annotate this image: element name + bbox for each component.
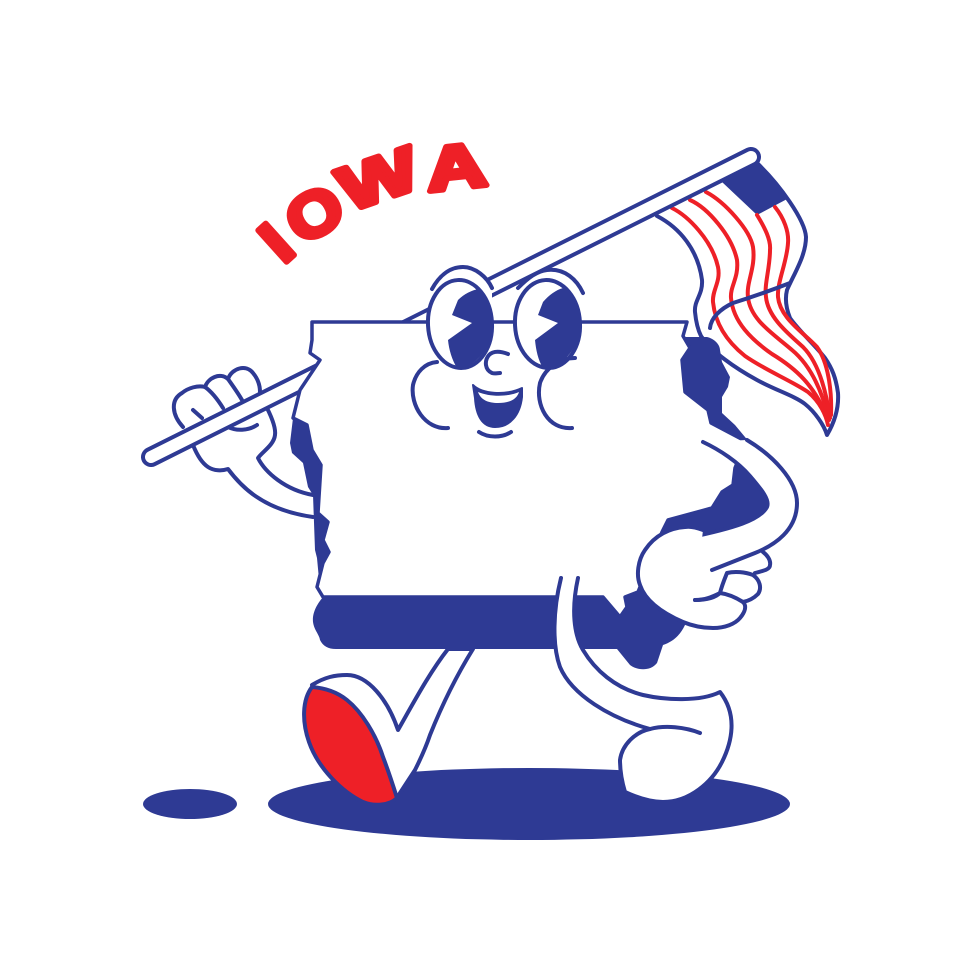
title: IOWA: A (423, 130, 490, 205)
flag pole (151, 157, 751, 457)
right leg and foot (554, 578, 732, 802)
title: IOWA: I (246, 211, 306, 275)
left eye (426, 278, 494, 370)
right eye (513, 278, 582, 370)
left cheek (413, 362, 448, 428)
state body: Iowa (293, 322, 747, 617)
face (413, 267, 582, 436)
flag canton (722, 163, 789, 215)
left eyebrow line (432, 267, 492, 289)
nose (486, 352, 508, 373)
American flag (657, 163, 838, 435)
left eyebrow (432, 267, 492, 300)
right cheek (539, 358, 575, 428)
lower lip (479, 432, 511, 436)
title: IOWA (246, 130, 490, 275)
title: IOWA: W (329, 133, 427, 225)
shoe sole (304, 687, 397, 805)
waist shadow (662, 462, 772, 545)
right eyebrow (518, 270, 583, 293)
title: IOWA: O (274, 171, 356, 258)
left arm and hand (174, 367, 320, 517)
hand (638, 527, 745, 628)
mouth (473, 385, 522, 427)
left pupil (448, 289, 492, 368)
flag red stripes (672, 192, 831, 425)
body shadow: upper right (680, 337, 750, 443)
right pupil (535, 288, 580, 368)
body shadow: left and bottom extrusion (290, 418, 690, 669)
right arm and hand (638, 440, 797, 628)
arm fill (687, 440, 797, 620)
ground shadow: large ellipse (268, 768, 790, 840)
teeth (478, 392, 519, 403)
left leg and shoe (304, 649, 473, 805)
flag fold (710, 283, 790, 328)
ground shadow: small ellipse (143, 789, 237, 819)
